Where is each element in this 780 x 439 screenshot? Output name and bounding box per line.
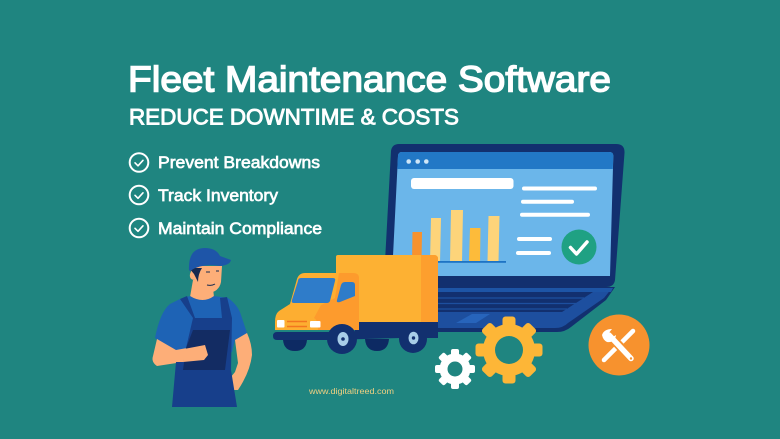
wrench outline gap <box>611 337 631 358</box>
website url: www.digitaltreed.com <box>308 387 394 396</box>
screen <box>392 152 613 276</box>
hand <box>183 345 208 362</box>
icon: large yellow gear <box>476 316 542 384</box>
subtitle: REDUCE DOWNTIME & COSTS <box>129 104 459 130</box>
search bar <box>411 178 514 189</box>
check badge <box>562 230 596 264</box>
cap <box>189 248 231 271</box>
item: prevent breakdowns: Prevent Breakdowns <box>158 154 320 172</box>
face details <box>206 271 219 285</box>
rear wheel <box>399 325 427 353</box>
bar chart <box>412 210 506 263</box>
head <box>190 266 222 293</box>
chassis <box>355 322 438 332</box>
item: track inventory: Track Inventory <box>158 187 279 205</box>
laptop base <box>386 287 615 332</box>
wrench <box>609 335 631 358</box>
rear-side dual wheels <box>283 340 307 351</box>
cab windshield <box>292 278 335 303</box>
laptop <box>384 144 625 332</box>
overalls <box>172 296 237 407</box>
checklist <box>130 153 322 238</box>
laptop lid <box>384 144 625 287</box>
blue shirt <box>155 296 247 352</box>
cargo box <box>336 255 438 322</box>
title: Fleet Maintenance Software <box>128 58 611 100</box>
mechanic figure <box>152 248 252 407</box>
front wheel <box>327 324 357 354</box>
screen header <box>397 152 613 169</box>
grille <box>287 322 307 326</box>
clipboard <box>183 330 230 370</box>
cab side window <box>337 282 355 302</box>
item: maintain compliance: Maintain Compliance <box>158 220 322 238</box>
neck <box>190 280 214 302</box>
icon: tools badge <box>588 314 650 376</box>
left arm <box>152 339 208 366</box>
cab <box>275 273 359 330</box>
text lines <box>516 186 597 255</box>
right arm <box>230 333 252 390</box>
icon: small white gear <box>435 349 475 389</box>
hair <box>189 268 202 282</box>
screwdriver <box>604 331 633 360</box>
delivery truck <box>273 255 438 354</box>
headlights <box>277 320 284 328</box>
